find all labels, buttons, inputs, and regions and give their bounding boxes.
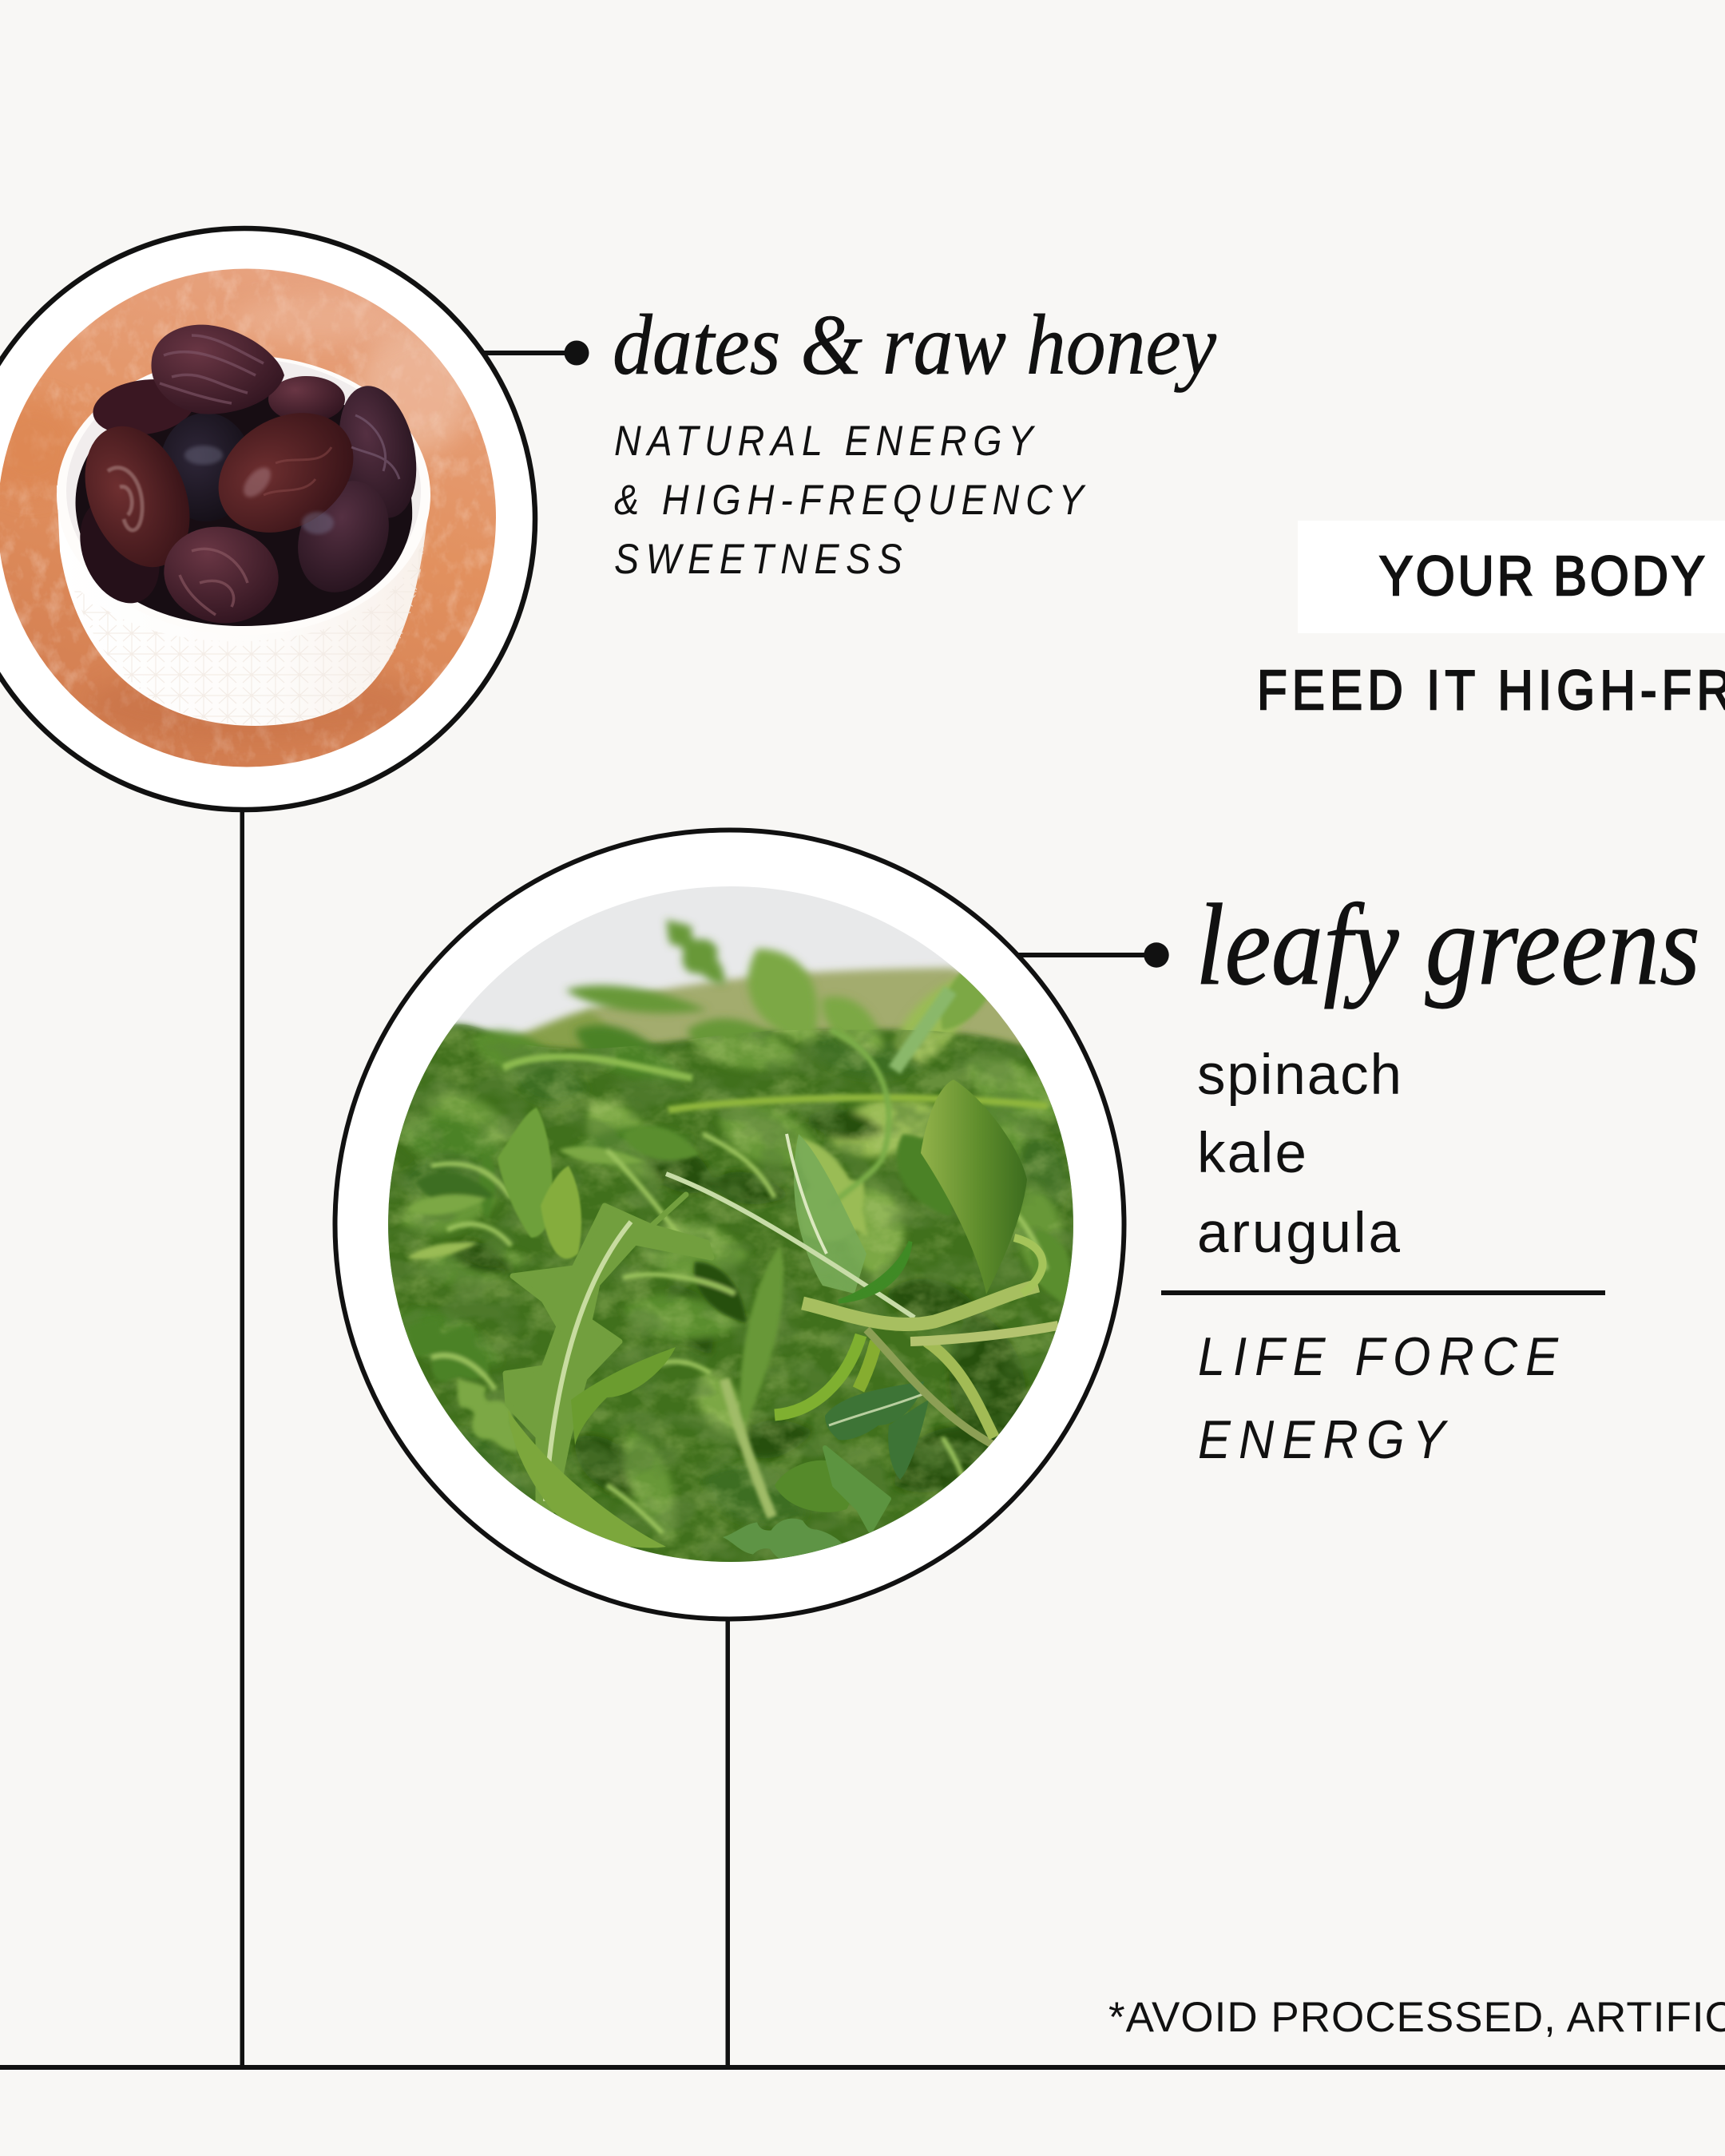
- description: leafy greens: LIFE FORCE: [1198, 1326, 1559, 1387]
- photo: arugula: [382, 878, 1083, 1573]
- foreground leaves: [498, 1080, 1058, 1565]
- title: dates and raw honey: dates & raw honey: [613, 298, 1216, 393]
- bowl: [57, 355, 430, 743]
- mid leaves: [391, 934, 1083, 1533]
- divider: [1161, 1290, 1605, 1295]
- ring: dates: [0, 228, 535, 810]
- label box: your body: [1298, 521, 1725, 633]
- baseline rule: [0, 2065, 1725, 2070]
- list: spinach, kale, arugula: [1197, 1044, 1402, 1265]
- stem: leafy greens to baseline: [725, 1617, 730, 2067]
- description: leafy greens: [1198, 1326, 1559, 1470]
- list: spinach, kale, arugula: arugula: [1197, 1202, 1401, 1265]
- description: leafy greens: ENERGY: [1198, 1409, 1449, 1470]
- leaf mottling: dark: [383, 1024, 1078, 1573]
- description: dates: NATURAL ENERGY: [614, 417, 1036, 465]
- stem: dates to baseline: [240, 807, 244, 2067]
- photo: dates in a white bowl: [0, 264, 503, 775]
- dates fruit: [65, 325, 427, 632]
- description: dates: [614, 417, 1086, 583]
- back leaves: [382, 906, 1080, 1549]
- ring: leafy greens: [335, 830, 1124, 1619]
- list: spinach, kale, arugula: kale: [1197, 1122, 1307, 1185]
- description: dates: SWEETNESS: [614, 535, 902, 583]
- description: dates: & HIGH-FREQUENCY: [614, 476, 1086, 524]
- panel: leafy greens: [335, 830, 1700, 1619]
- list: spinach, kale, arugula: spinach: [1197, 1044, 1402, 1107]
- connector: leafy greens: [1018, 942, 1169, 968]
- panel: dates and raw honey: [0, 228, 1216, 810]
- label box: your body: YOUR BODY: [1379, 545, 1705, 608]
- leaf mottling: light: [383, 1024, 1078, 1573]
- connector: dates: [484, 340, 589, 366]
